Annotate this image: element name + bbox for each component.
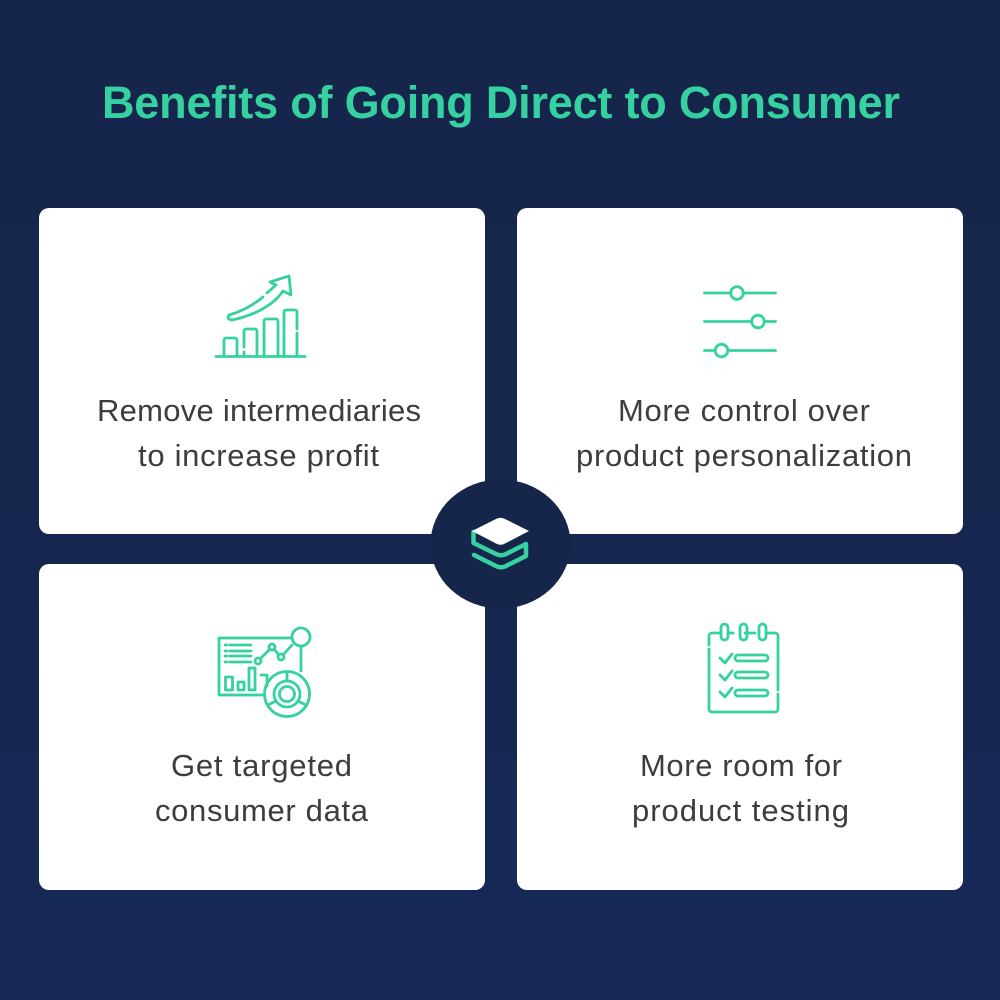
icon: checklist notepad (709, 624, 778, 712)
text: get targeted: Get targeted (171, 748, 352, 783)
icon: rising bar chart (216, 276, 305, 356)
center badge (430, 480, 570, 608)
panel: consumer data (39, 564, 485, 890)
text: remove intermediaries: Remove intermediaries (97, 393, 421, 428)
title: Benefits of Going Direct to Consumer (102, 77, 900, 128)
text: product testing: product testing (632, 793, 849, 828)
icon: sliders (704, 287, 776, 357)
panel: remove intermediaries (39, 208, 485, 534)
text: to increase profit: to increase profit (138, 438, 379, 473)
text: more control over: More control over (618, 393, 870, 428)
icon: stacked layers (472, 518, 529, 567)
text: more room for: More room for (640, 748, 842, 783)
icon: data dashboard (219, 628, 310, 716)
text: consumer data: consumer data (155, 793, 369, 828)
panel: product personalization (517, 208, 963, 534)
text: product personalization: product personalization (576, 438, 912, 473)
panel: product testing (517, 564, 963, 890)
